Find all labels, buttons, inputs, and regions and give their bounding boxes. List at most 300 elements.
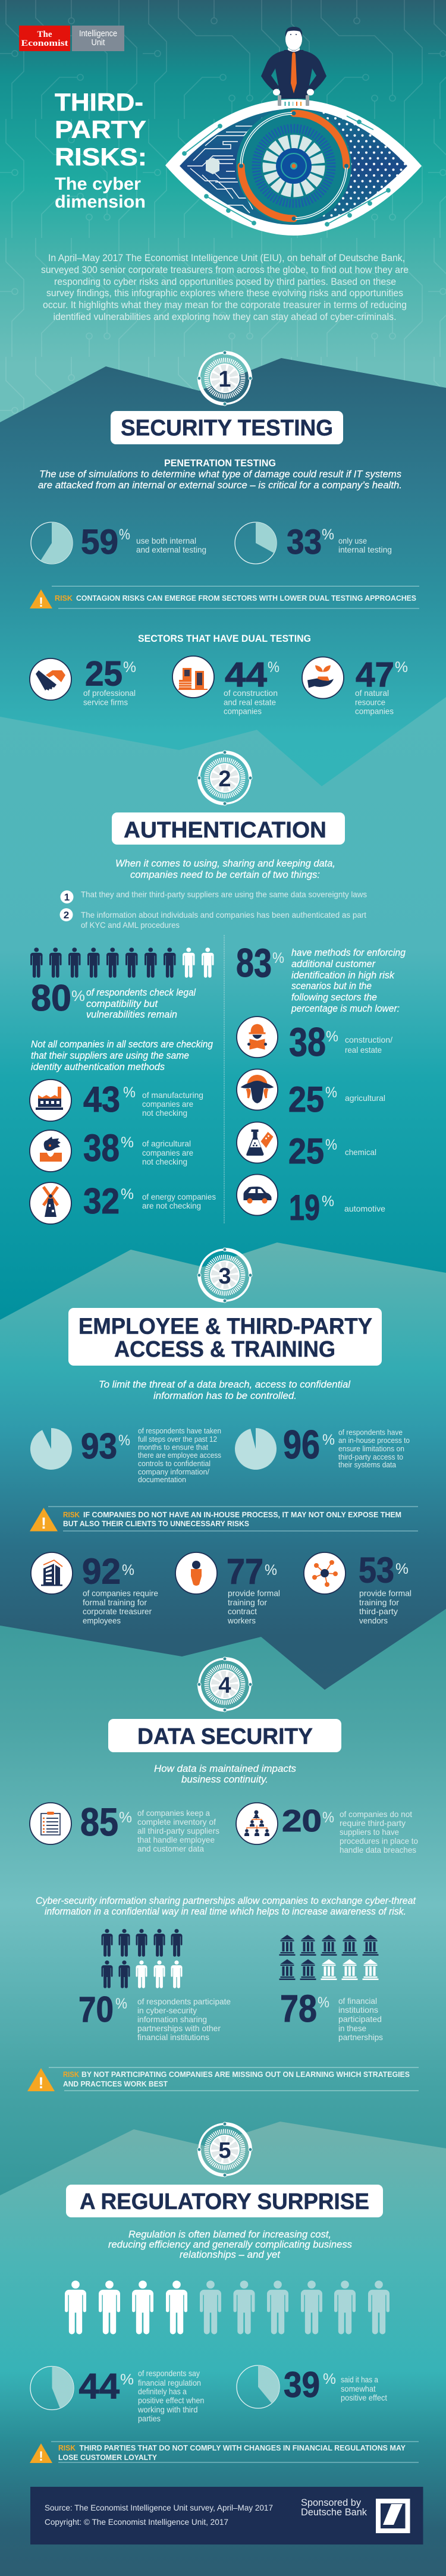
stat: 83% enforce additional identification: scenarios but in the: [291, 980, 372, 992]
numbered list: of KYC and AML procedures: [81, 920, 180, 930]
stat: 44% construction and real estate: and real estate: [224, 697, 276, 707]
risk callout 3: AND PRACTICES WORK BEST: [63, 2079, 168, 2088]
pie chart: 39%: %: [323, 2371, 336, 2387]
text: information sharing partnerships: information in a confidential way in real time which helps to increase awareness of risk.: [45, 1906, 406, 1917]
stat: 85% complete inventory: and customer data: [137, 1844, 204, 1853]
section 2 background: [0, 696, 446, 1332]
eye lens: [180, 109, 407, 225]
teal eyelid lines: [183, 116, 390, 226]
stat: 80% check legal compatibility: compatibility but: [86, 998, 158, 1009]
stat: 47% natural resource: of natural: [355, 688, 389, 698]
icon: warning triangle: [30, 2443, 52, 2464]
pie chart: 33%: only use: [338, 536, 367, 545]
stat: 78% financial institutions participated: in these: [338, 2023, 366, 2033]
numbered list: 1: [64, 892, 70, 903]
section 3 badge: [197, 1248, 252, 1303]
pie chart: 93%: documentation: [138, 1475, 186, 1484]
stat: 25% chemical: [237, 1122, 376, 1171]
icon: buildings: [172, 656, 214, 698]
stat: 43% manufacturing: 43: [83, 1080, 120, 1119]
stat: 77% contract workers: training for: [228, 1598, 267, 1607]
introduction text: survey findings, this infographic explores where these evolving risks and opportunities: [46, 287, 403, 299]
text: section 5 intro: Regulation is often blamed for increasing cost,: [128, 2229, 331, 2240]
stat: 38% construction: real estate: [345, 1045, 382, 1055]
stat: 25% professional service firms: 25: [85, 654, 123, 694]
logo: The Economist Intelligence Unit: [19, 26, 124, 51]
pupil: [276, 148, 312, 184]
pie chart: 93%: [30, 1426, 221, 1484]
text: penetration testing: [38, 457, 402, 491]
introduction text: responding to cyber risks and opportunities posed by third parties. Based on these: [54, 276, 396, 287]
stat: 83% enforce additional identification: have methods for enforcing: [291, 947, 406, 958]
stat: 44% construction and real estate: [172, 655, 279, 716]
icon: person: [175, 1552, 217, 1594]
stat: 83% enforce additional identification: 83: [236, 940, 272, 986]
text: section 4 intro: business continuity.: [181, 1774, 268, 1785]
risk callout 1: CONTAGION RISKS CAN EMERGE FROM SECTORS WITH LOWER DUAL TESTING APPROACHES: [76, 594, 416, 603]
pie chart: 96%: third-party access to: [338, 1452, 403, 1461]
stat: 38% agricultural: companies are: [142, 1148, 193, 1157]
section 1 badge: [197, 351, 252, 406]
stat: 44% construction and real estate: companies: [224, 707, 262, 716]
text: authentication intro: When it comes to using, sharing and keeping data,: [115, 858, 335, 869]
heading: employee and third-party access and training: [68, 1308, 382, 1366]
pie chart: 59%: %: [119, 526, 130, 543]
stat: 19% automotive: 19: [289, 1188, 320, 1228]
circuit traces: [187, 118, 262, 213]
stat: 53% third-party vendors: training for: [359, 1598, 399, 1607]
risk callout 3: RISK: [63, 2070, 80, 2079]
stat: 85% complete inventory: [30, 1800, 219, 1853]
pie chart: 33%: 33: [287, 523, 322, 561]
stat: 32% energy: of energy companies: [142, 1192, 216, 1201]
stat: 92% corporate treasurer training: [31, 1551, 158, 1625]
stat: 92% corporate treasurer training: corporate treasurer: [83, 1607, 152, 1616]
stat: 47% natural resource: 47: [356, 655, 394, 694]
text: section 3 intro: information has to be controlled.: [153, 1390, 297, 1401]
stat: 77% contract workers: [175, 1551, 280, 1625]
stat: 53% third-party vendors: %: [395, 1561, 409, 1577]
risk callout 1: [30, 586, 419, 610]
heading: employee and third-party access and training: EMPLOYEE & THIRD-PARTY: [78, 1314, 372, 1339]
logo: The Economist Intelligence Unit: Unit: [92, 37, 105, 48]
heading: authentication: AUTHENTICATION: [124, 818, 326, 843]
numbered list: The information about individuals and companies has been authenticated as part: [81, 910, 366, 920]
stat: 92% corporate treasurer training: employees: [83, 1615, 121, 1625]
section 3 badge: 3: [218, 1264, 231, 1289]
pie chart: 93%: %: [118, 1432, 130, 1449]
heading: data security: DATA SECURITY: [137, 1724, 313, 1749]
circuit chip: [206, 158, 219, 174]
section 4 background: [0, 1606, 446, 2201]
pictogram: 80% of people: [30, 947, 214, 978]
text: section 3 intro: To limit the threat of a data breach, access to confidential: [99, 1379, 351, 1390]
risk callout 2: BUT ALSO THEIR CLIENTS TO UNNECESSARY RISKS: [63, 1519, 249, 1528]
pie chart: 44%: definitely has a: [138, 2387, 187, 2396]
pie chart: 44%: [30, 2366, 205, 2423]
stat: 70% participate in partnerships: [78, 1990, 231, 2042]
text: information sharing partnerships: Cyber-security information sharing partnerships allow companies to exchange cyber-threat: [36, 1895, 416, 1906]
icon: warning triangle: [30, 1508, 58, 1532]
stat: 25% chemical: chemical: [345, 1147, 376, 1157]
stat: 85% complete inventory: complete inventory of: [137, 1817, 216, 1827]
heading: authentication: [112, 812, 345, 845]
stat: 70% participate in partnerships: in cyber-security: [137, 2006, 197, 2015]
stat: 25% professional service firms: service firms: [83, 697, 128, 707]
stat: 47% natural resource: %: [395, 659, 408, 676]
stat: 78% financial institutions participated: %: [318, 1994, 329, 2011]
stat: 92% corporate treasurer training: 92: [82, 1551, 121, 1592]
stat: 20% no third-party breach procedures: procedures in place to: [340, 1836, 418, 1846]
pie chart: 59%: 59: [81, 523, 118, 561]
stat: 53% third-party vendors: third-party: [359, 1607, 398, 1616]
pie chart: 93%: 93: [81, 1426, 117, 1466]
stat: 38% agricultural: %: [121, 1134, 134, 1151]
introduction text: In April–May 2017 The Economist Intelligence Unit (EIU), on behalf of Deutsche Bank,: [48, 252, 405, 263]
stat: 85% complete inventory: that handle employee: [137, 1835, 215, 1844]
pie chart: 93%: controls to confidential: [138, 1459, 211, 1468]
icon: warning triangle: [27, 2068, 55, 2092]
sponsor text: [301, 2497, 367, 2518]
pie chart: 39%: 39: [284, 2365, 320, 2405]
stat: 25% agricultural: [237, 1069, 385, 1119]
pie chart: 59%: [31, 522, 206, 564]
stat: 47% natural resource: resource: [355, 697, 385, 707]
pie chart: 96%: ensure limitations on: [338, 1444, 404, 1453]
stat: 70% participate in partnerships: 70: [78, 1990, 114, 2029]
stat: 19% automotive: automotive: [344, 1204, 385, 1213]
stat: 85% complete inventory: all third-party suppliers: [137, 1826, 219, 1835]
stat: 25% professional service firms: of professional: [83, 688, 136, 698]
stat: 25% chemical: %: [325, 1137, 337, 1153]
icon: factory: [30, 1080, 71, 1121]
stat: 20% no third-party breach procedures: suppliers to have: [340, 1827, 399, 1837]
dot pattern: [322, 112, 406, 217]
stat: 78% financial institutions participated: 78: [280, 1987, 317, 2030]
source text: [45, 2503, 273, 2527]
stat: 25% chemical: 25: [288, 1131, 324, 1171]
text: authentication intro: companies need to be certain of two things:: [130, 869, 320, 880]
pie chart: 96%: 96: [283, 1422, 320, 1467]
introduction text: [41, 252, 409, 322]
stat: 77% contract workers: workers: [227, 1615, 256, 1625]
stat: 77% contract workers: %: [265, 1562, 277, 1579]
stat: 20% no third-party breach procedures: handle data breaches: [340, 1845, 416, 1855]
stat: 20% no third-party breach procedures: %: [322, 1809, 334, 1826]
orange arcs: [241, 113, 346, 219]
pie chart: 59%: use both internal: [136, 536, 196, 545]
stat: 44% construction and real estate: of construction: [224, 688, 278, 698]
pie chart: 93%: company information/: [138, 1467, 209, 1476]
stat: 92% corporate treasurer training: formal training for: [83, 1598, 147, 1607]
stat: 83% enforce additional identification: additional customer: [291, 958, 376, 969]
stat: 53% third-party vendors: 53: [359, 1550, 394, 1590]
text: not all companies: that their suppliers are using the same: [31, 1050, 189, 1061]
text: not all companies: Not all companies in all sectors are checking: [31, 1038, 213, 1050]
icon: hand sowing seeds: [30, 1130, 71, 1172]
stat: 80% check legal compatibility: vulnerabilities remain: [86, 1009, 177, 1020]
pie chart: 96%: their systems data: [338, 1460, 397, 1469]
text: penetration testing: PENETRATION TESTING: [164, 457, 276, 469]
stat: 38% agricultural: not checking: [142, 1157, 187, 1166]
text: information sharing partnerships: [36, 1895, 416, 1917]
text: section 4 intro: [154, 1763, 296, 1785]
introduction text: surveyed 300 senior corporate treasurers from across the globe, to find out how they are: [41, 264, 409, 275]
heading: sectors that have dual testing: SECTORS THAT HAVE DUAL TESTING: [138, 633, 311, 644]
pie chart: 93%: of respondents have taken: [138, 1426, 221, 1435]
stat: 77% contract workers: contract: [228, 1607, 257, 1616]
risk callout 2: [30, 1507, 418, 1532]
stat: 20% no third-party breach procedures: 20: [282, 1804, 322, 1838]
text: section 4 intro: How data is maintained impacts: [154, 1763, 296, 1774]
logo: The Economist Intelligence Unit: Economist: [21, 39, 68, 48]
stat: 43% manufacturing: [30, 1080, 203, 1121]
stat: 47% natural resource: companies: [355, 707, 394, 716]
stat: 80% check legal compatibility: %: [71, 988, 85, 1005]
icon: windmill: [30, 1182, 71, 1224]
title: dimension: [55, 192, 146, 212]
title: PARTY: [55, 115, 146, 143]
heading: a regulatory surprise: A REGULATORY SURPRISE: [80, 2189, 369, 2214]
numbered list: [59, 890, 367, 930]
pie chart: 59%: and external testing: [136, 545, 206, 554]
stat: 47% natural resource: [302, 655, 408, 716]
stat: 78% financial institutions participated: participated: [338, 2014, 382, 2023]
pie chart: 93%: there are employee access: [138, 1451, 221, 1460]
section 3 background shape: [0, 1242, 446, 1690]
stat: 25% agricultural: 25: [288, 1080, 324, 1119]
stat: 78% financial institutions participated: of financial: [338, 1996, 377, 2006]
stat: 53% third-party vendors: provide formal: [359, 1588, 412, 1598]
stat: 92% corporate treasurer training: %: [122, 1562, 134, 1579]
icon: construction worker: [237, 1016, 278, 1058]
pie chart: 39%: said it has a: [341, 2375, 378, 2384]
stat: 38% agricultural: of agricultural: [142, 1138, 191, 1148]
stat: 78% financial institutions participated: [280, 1987, 383, 2042]
stat: 83% enforce additional identification: percentage is much lower:: [291, 1003, 400, 1014]
iris tick ring: [256, 128, 331, 203]
icon: chemical flask: [237, 1122, 278, 1163]
stat: 25% professional service firms: %: [123, 659, 136, 676]
source text: Copyright: © The Economist Intelligence Unit, 2017: [45, 2517, 228, 2527]
icon: clipboard: [30, 1803, 71, 1844]
title: RISKS:: [55, 143, 147, 171]
risk callout 2: IF COMPANIES DO NOT HAVE AN IN-HOUSE PROCESS, IT MAY NOT ONLY EXPOSE THEM: [83, 1510, 401, 1519]
pie chart: 96%: %: [322, 1432, 335, 1448]
logo: The Economist Intelligence Unit: Intelligence: [79, 29, 117, 39]
title: THIRD-: [55, 88, 143, 116]
illustration: man leaning on cyber eye: [165, 27, 422, 236]
text: section 5 intro: [108, 2229, 352, 2260]
stat: 20% no third-party breach procedures: of companies do not: [340, 1809, 412, 1819]
pie chart: 44%: %: [120, 2371, 134, 2388]
stat: 83% enforce additional identification: [236, 940, 406, 1014]
stat: 32% energy: %: [121, 1186, 134, 1203]
stat: 25% agricultural: agricultural: [345, 1093, 385, 1103]
pie chart: 93%: full steps over the past 12: [138, 1435, 217, 1444]
hero background: [0, 0, 446, 428]
text: penetration testing: The use of simulations to determine what type of damage could result if IT systems: [39, 469, 401, 479]
sponsor text: Deutsche Bank: [301, 2506, 367, 2518]
stat: 83% enforce additional identification: %: [272, 950, 284, 967]
stat: 77% contract workers: provide formal: [228, 1588, 280, 1598]
pie chart: 96%: [235, 1422, 410, 1470]
stat: 25% agricultural: %: [325, 1084, 337, 1101]
pie chart: 39%: somewhat: [341, 2384, 376, 2393]
icon: sheep head: [237, 1069, 278, 1110]
stat: 32% energy: 32: [83, 1181, 120, 1221]
pictogram: 70% of people: [101, 1929, 182, 1988]
sponsor text: Sponsored by: [301, 2497, 361, 2508]
stat: 70% participate in partnerships: %: [115, 1995, 127, 2012]
stat: 85% complete inventory: %: [119, 1809, 132, 1826]
icon: network: [304, 1552, 346, 1594]
stat: 38% construction: %: [326, 1028, 338, 1045]
stat: 44% construction and real estate: 44: [225, 655, 267, 694]
pie chart: 33%: [235, 522, 392, 564]
text: authentication intro: [115, 858, 335, 880]
icon: handshake: [30, 658, 71, 700]
text: section 5 intro: relationships – and yet: [180, 2249, 281, 2260]
stat: 78% financial institutions participated: partnerships: [338, 2032, 383, 2042]
stat: 44% construction and real estate: %: [268, 659, 279, 676]
numbered list: 2: [64, 909, 69, 921]
stat: 77% contract workers: 77: [227, 1551, 263, 1592]
pictogram: 78% of banks: [279, 1935, 378, 1980]
text: not all companies: [31, 1038, 213, 1072]
risk callout 3: [27, 2067, 419, 2092]
stat: 83% enforce additional identification: identification in high risk: [291, 969, 395, 981]
stat: 80% check legal compatibility: of respondents check legal: [86, 987, 196, 998]
stat: 38% construction: 38: [289, 1019, 326, 1065]
heading: security testing: SECURITY TESTING: [121, 416, 333, 441]
stat: 20% no third-party breach procedures: require third-party: [340, 1818, 406, 1828]
pie chart: 39%: [237, 2365, 387, 2408]
pie chart: 96%: an in-house process to: [338, 1436, 410, 1445]
stat: 70% participate in partnerships: information sharing: [137, 2015, 207, 2024]
text: penetration testing: are attacked from an internal or external source – is critical for a company’s health.: [38, 479, 402, 491]
icon: car: [237, 1174, 278, 1216]
pictogram: 44% of people: [65, 2280, 390, 2335]
section 4 badge: [197, 1657, 252, 1712]
risk callout 4: THIRD PARTIES THAT DO NOT COMPLY WITH CHANGES IN FINANCIAL REGULATIONS MAY: [80, 2443, 406, 2452]
stat: 38% agricultural: [30, 1127, 193, 1172]
pie chart: 44%: of respondents say: [138, 2368, 200, 2378]
section 4 badge: 4: [218, 1673, 231, 1698]
stat: 43% manufacturing: of manufacturing: [142, 1090, 203, 1100]
introduction text: occur. It highlights what they may mean for the corporate treasurer in terms of reducing: [43, 299, 407, 310]
text: section 5 intro: reducing efficiency and generally complicating business: [108, 2239, 352, 2250]
stat: 32% energy: [30, 1181, 216, 1224]
icon: warning triangle: !: [38, 2074, 44, 2092]
stat: 83% enforce additional identification: following sectors the: [291, 992, 377, 1003]
pie chart: 96%: of respondents have: [338, 1427, 403, 1437]
section 5 background shape: [0, 2122, 446, 2576]
risk callout 4: RISK: [58, 2443, 76, 2452]
stat: 85% complete inventory: of companies keep a: [137, 1808, 210, 1818]
stat: 38% agricultural: 38: [83, 1127, 120, 1169]
section 1 background shape: [0, 358, 446, 786]
stat: 70% participate in partnerships: of respondents participate: [137, 1997, 231, 2006]
title: [55, 88, 147, 212]
section 2 badge: 2: [218, 767, 231, 792]
stat: 53% third-party vendors: vendors: [359, 1615, 388, 1625]
stat: 70% participate in partnerships: financial institutions: [137, 2032, 209, 2042]
text: not all companies: identity authentication methods: [31, 1061, 165, 1072]
iris petals: [269, 142, 318, 190]
stat: 85% complete inventory: 85: [80, 1800, 118, 1844]
stat: 43% manufacturing: companies are: [142, 1099, 193, 1109]
risk callout 4: LOSE CUSTOMER LOYALTY: [58, 2453, 157, 2462]
heading: data security: [108, 1719, 341, 1752]
icon: organisation chart: [236, 1803, 278, 1844]
pie chart: 44%: 44: [78, 2367, 120, 2406]
stat: 19% automotive: %: [322, 1193, 334, 1210]
stat: 78% financial institutions participated: institutions: [338, 2005, 378, 2015]
section 5 badge: 5: [218, 2138, 231, 2163]
pie chart: 93%: months to ensure that: [138, 1443, 208, 1451]
icon: hand holding plant: [302, 657, 344, 698]
stat: 70% participate in partnerships: partnerships with other: [137, 2023, 221, 2033]
stat: 53% third-party vendors: [304, 1550, 412, 1625]
title: The cyber: [55, 174, 141, 194]
icon: warning triangle: [30, 589, 52, 610]
pie chart: 39%: positive effect: [341, 2393, 387, 2402]
risk callout 1: RISK: [55, 594, 73, 603]
pie chart: 33%: internal testing: [338, 545, 392, 554]
icon: office tower: [31, 1552, 73, 1594]
stat: 43% manufacturing: not checking: [142, 1108, 187, 1118]
stat: 38% construction: [237, 1016, 392, 1065]
section 2 badge: [197, 751, 252, 805]
pie chart: 44%: parties: [138, 2414, 161, 2423]
man: [261, 27, 326, 99]
stat: 32% energy: are not checking: [142, 1201, 201, 1210]
section 1 badge: 1: [218, 367, 231, 392]
stat: 80% check legal compatibility: [31, 978, 196, 1020]
risk callout 2: RISK: [63, 1510, 80, 1519]
eye control panel: [278, 95, 309, 106]
icon: warning triangle: !: [39, 2449, 43, 2464]
stat: 38% construction: construction/: [345, 1035, 392, 1044]
section 5 badge: [197, 2122, 252, 2177]
icon: Deutsche Bank logo: [376, 2499, 410, 2533]
footer panel: [30, 2487, 423, 2544]
logo: The Economist Intelligence Unit: The: [37, 30, 52, 39]
pie chart: 33%: %: [322, 526, 334, 543]
stat: 25% professional service firms: [30, 654, 136, 707]
pie chart: 44%: positive effect when: [138, 2396, 205, 2405]
stat: 19% automotive: [237, 1174, 385, 1228]
icon: warning triangle: !: [39, 595, 43, 610]
introduction text: identified vulnerabilities and exploring how they can stay ahead of cyber-criminals.: [54, 311, 396, 322]
stat: 80% check legal compatibility: 80: [31, 978, 71, 1019]
pie chart: 44%: financial regulation: [138, 2378, 201, 2387]
eye white: [165, 99, 422, 236]
source text: Source: The Economist Intelligence Unit survey, April–May 2017: [45, 2503, 273, 2512]
numbered list: That they and their third-party suppliers are using the same data sovereignty laws: [81, 890, 367, 899]
stat: 20% no third-party breach procedures: [236, 1803, 418, 1855]
pie chart: 44%: working with third: [137, 2405, 197, 2414]
risk callout 3: BY NOT PARTICIPATING COMPANIES ARE MISSING OUT ON LEARNING WHICH STRATEGIES: [81, 2070, 410, 2079]
icon: warning triangle: !: [41, 1514, 46, 1532]
iris: [236, 108, 351, 224]
stat: 43% manufacturing: %: [123, 1084, 136, 1101]
risk callout 4: [30, 2442, 419, 2464]
text: section 3 intro: [99, 1379, 351, 1401]
stat: 92% corporate treasurer training: of companies require: [83, 1588, 158, 1598]
heading: employee and third-party access and training: ACCESS & TRAINING: [114, 1337, 335, 1362]
